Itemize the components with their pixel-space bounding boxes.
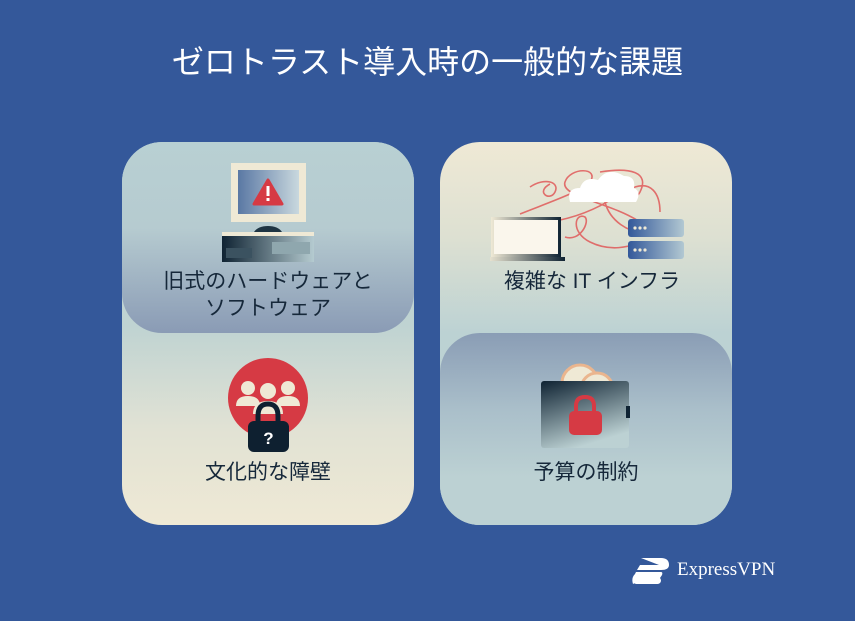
- logo: ExpressVPN: [632, 558, 775, 584]
- icon: complex infrastructure: [490, 169, 684, 261]
- text: legacy hardware: 旧式のハードウェアと: [163, 270, 373, 293]
- panel: legacy hardware: [122, 142, 414, 333]
- text: cultural barriers: 文化的な障壁: [205, 461, 331, 484]
- icon: people with lock: ?: [263, 429, 274, 448]
- icon: wallet with lock: [541, 364, 630, 448]
- icon: people with lock: [228, 358, 308, 452]
- text: legacy hardware: ソフトウェア: [205, 297, 331, 320]
- panel: right card: [440, 142, 732, 525]
- panel: left card: [122, 142, 414, 525]
- text: complex IT infrastructure: 複雑な IT インフラ: [504, 270, 680, 293]
- panel: budget constraints: [440, 333, 732, 525]
- text: budget constraints: 予算の制約: [534, 461, 638, 484]
- title: ゼロトラスト導入時の一般的な課題: [172, 44, 683, 80]
- logo: ExpressVPN: ExpressVPN: [677, 559, 775, 580]
- icon: old computer: [222, 163, 314, 262]
- text: legacy hardware: [163, 270, 373, 320]
